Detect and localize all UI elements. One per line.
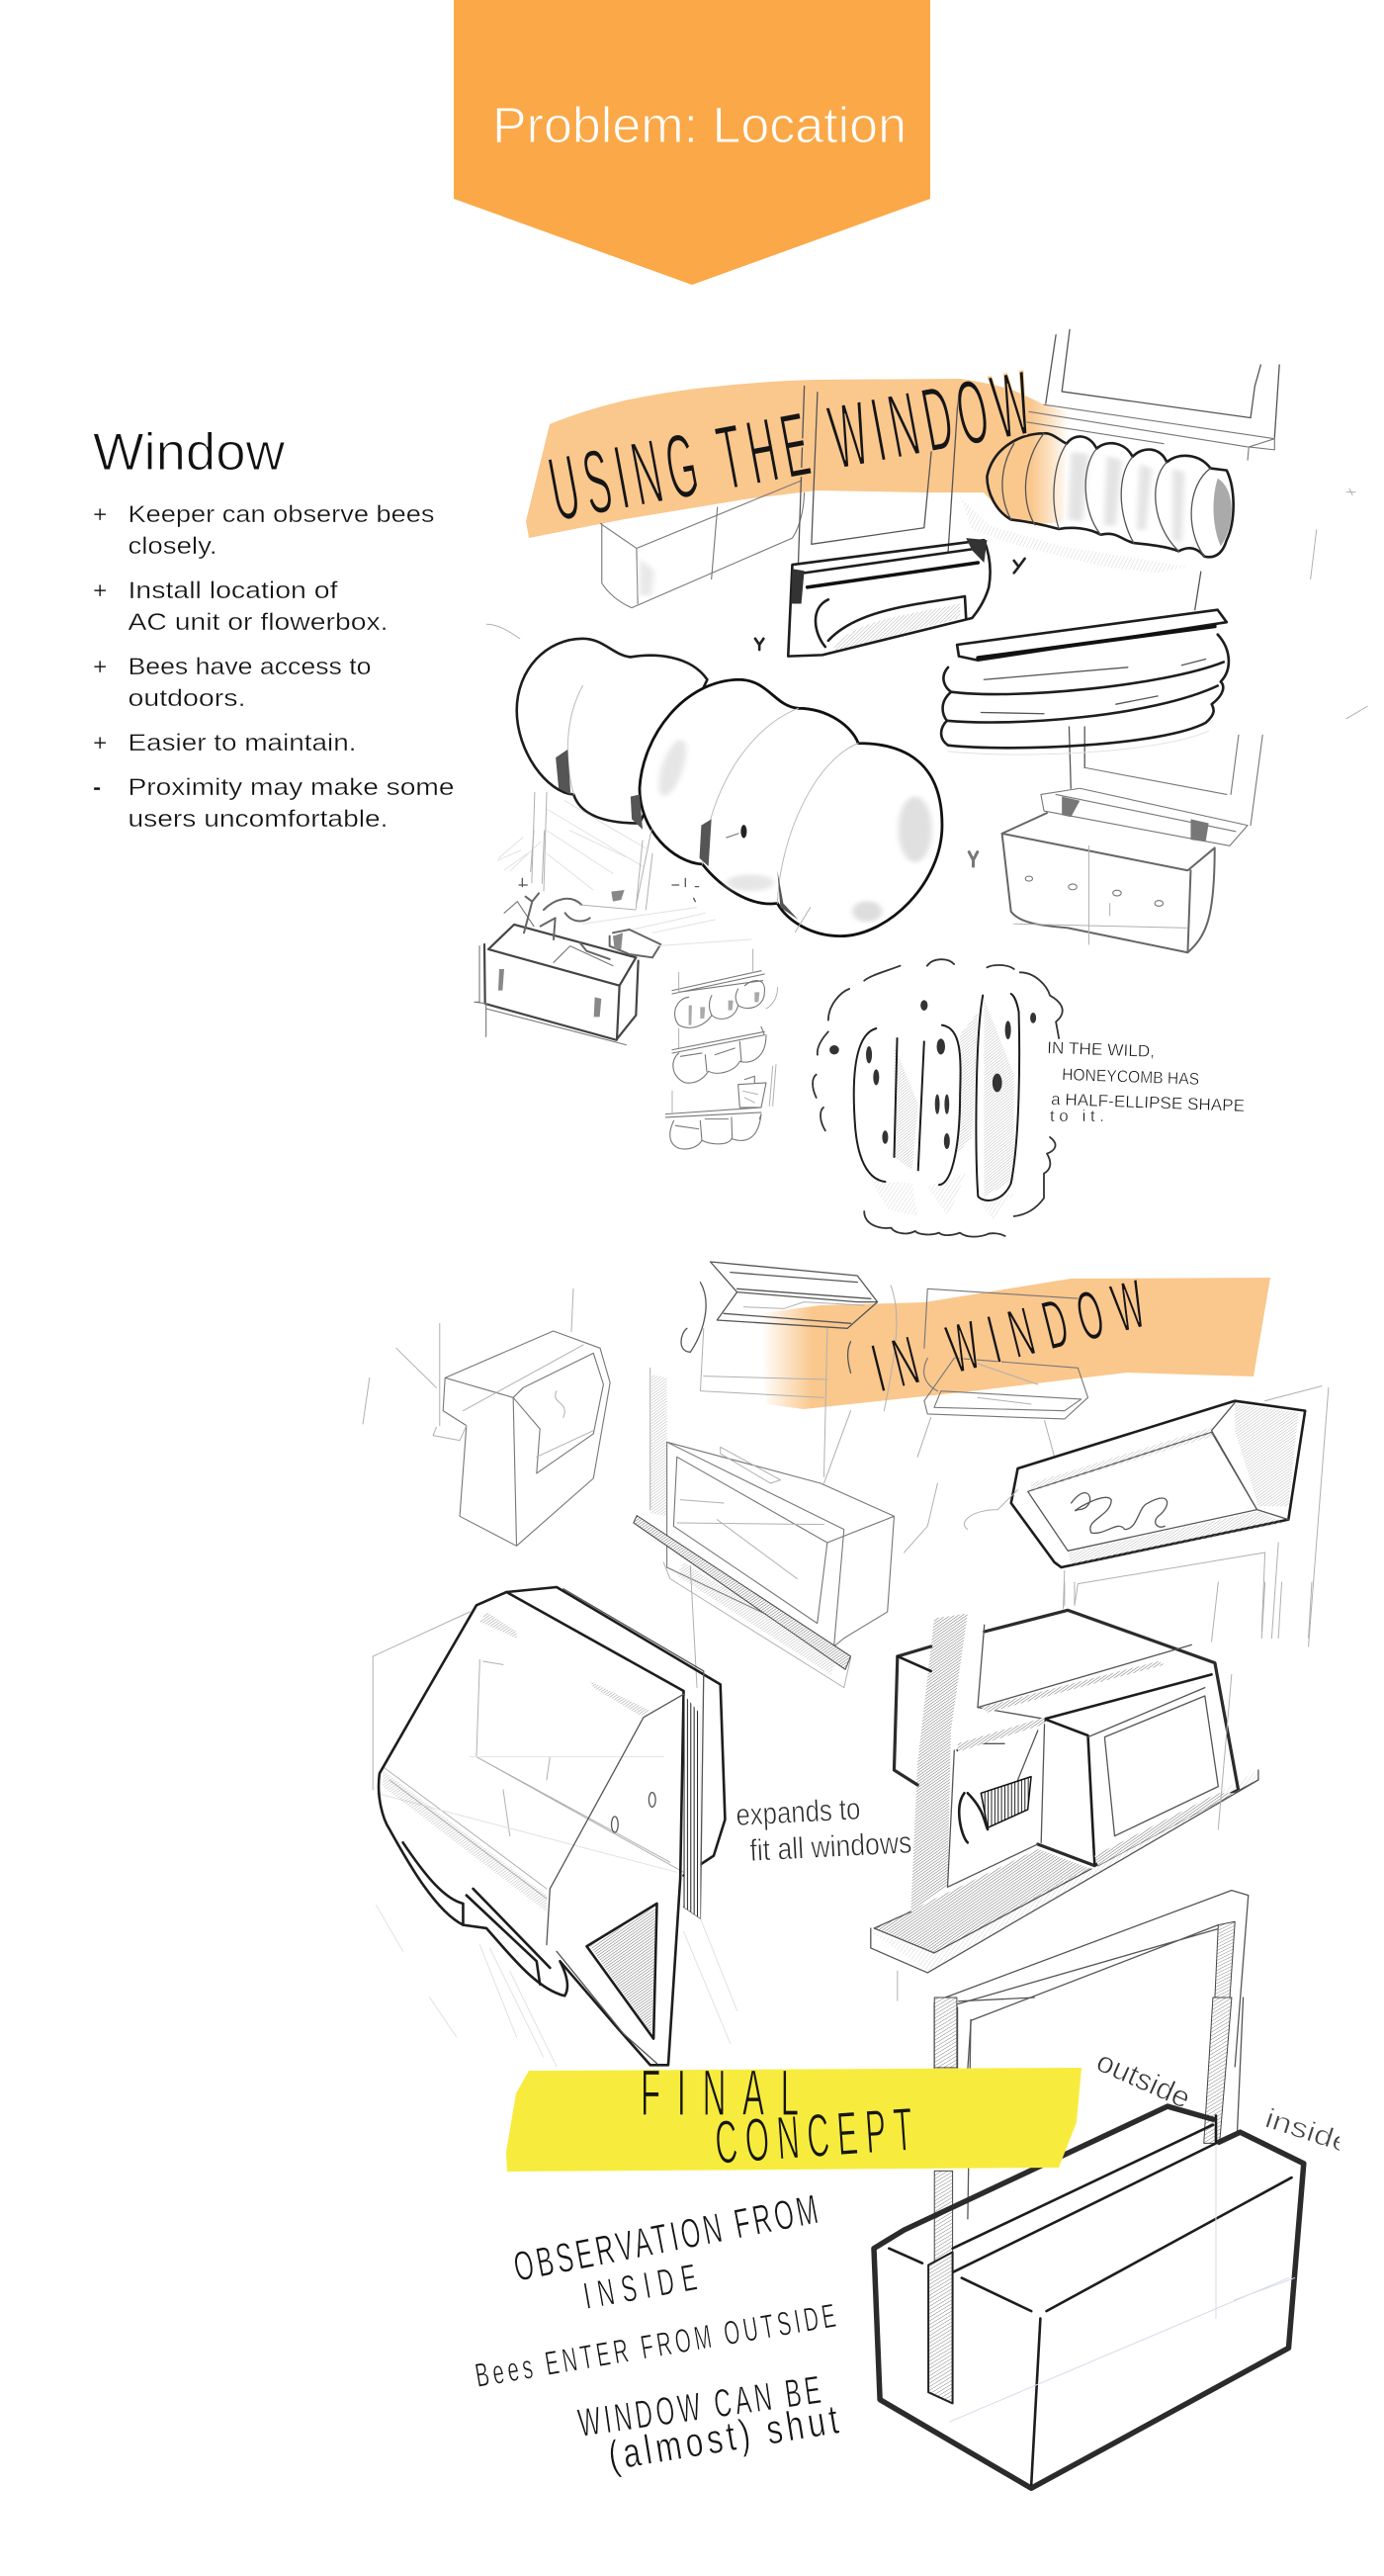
sketch: window frame strips <box>934 1998 1244 2264</box>
sketch: window frame above final concept <box>934 1891 1249 2070</box>
title banner: Problem: Location: Problem: Location <box>492 97 907 153</box>
sketch: box on window sill with vent <box>871 1582 1312 2000</box>
sketch: three stacked jar planters <box>665 949 778 1149</box>
sketch: flowerbox pocket with bar <box>755 387 1025 657</box>
icon: three half-ellipse honeycomb slabs <box>894 999 1014 1197</box>
list: pros and cons of window location: Bees have access to <box>129 654 372 680</box>
handwritten heading: FINAL CONCEPT <box>641 2058 914 2177</box>
sketch: central box on window sill <box>634 1375 894 1688</box>
sketches: window concepts, lower sheet bottom <box>373 1582 1312 2070</box>
list: pros and cons of window location: + <box>93 577 107 604</box>
annotation: final concept notes: INSIDE <box>580 2257 700 2317</box>
annotation: honeycomb note: IN THE WILD, <box>1047 1038 1155 1061</box>
list: pros and cons of window location: - <box>93 774 101 801</box>
annotation: final concept notes: OBSERVATION FROM <box>510 2187 822 2291</box>
annotation: inside label: inside <box>1261 2102 1355 2160</box>
highlight: orange brush behind IN WINDOW <box>761 1278 1270 1409</box>
title banner: Problem: Location <box>454 0 930 285</box>
list: pros and cons of window location: Keeper can observe bees <box>129 501 435 528</box>
sketch: final box outline <box>874 2106 1304 2488</box>
sketch: window frame with sill <box>1020 329 1279 460</box>
list: pros and cons of window location: + <box>93 654 107 680</box>
sketch: small planter with flowers, lower left <box>475 831 778 1149</box>
sketch: accordion flexible hive <box>941 572 1229 788</box>
sketch: angled window box, thick outline <box>905 1386 1329 1646</box>
sketch: T-shaped wall unit <box>363 1288 610 1546</box>
handwritten heading: FINAL CONCEPT: CONCEPT <box>713 2096 914 2177</box>
annotation: expands to fit all windows: expands to <box>735 1791 861 1832</box>
list: pros and cons of window location: users uncomfortable. <box>129 806 388 833</box>
sketch: rounded wall box <box>601 481 805 608</box>
list: pros and cons of window location: + <box>93 501 107 528</box>
annotation: honeycomb note: a HALF-ELLIPSE SHAPE <box>1051 1090 1245 1115</box>
sketch: second hook box inside the highlight <box>917 1288 1087 1457</box>
annotation: outside label: outside <box>1091 2045 1195 2115</box>
sketch: window-mounted planter box <box>969 735 1262 952</box>
annotation: honeycomb note: HONEYCOMB HAS <box>1062 1065 1199 1089</box>
highlight: IN WINDOW label: IN WINDOW <box>865 1265 1153 1407</box>
highlight: orange brush behind USING THE WINDOW <box>526 379 1070 538</box>
list: pros and cons of window location <box>93 501 455 833</box>
annotation: expands to fit all windows <box>735 1791 912 1868</box>
sketch: wild honeycomb in a cloud of bees <box>813 959 1063 1237</box>
list: pros and cons of window location: closely. <box>129 533 217 560</box>
annotation: final concept notes <box>473 2187 842 2479</box>
sketch: final concept hive box through window <box>874 1998 1304 2488</box>
list: pros and cons of window location: Proximity may make some <box>129 774 455 801</box>
sketch: top-mounted hook box <box>650 1262 897 1510</box>
annotation: final concept notes: (almost) shut <box>605 2395 842 2479</box>
list: pros and cons of window location: outdoors. <box>129 685 245 712</box>
annotation: honeycomb note: to it. <box>1050 1107 1104 1125</box>
list: pros and cons of window location: + <box>93 730 107 756</box>
handwritten heading: USING THE WINDOW: USING THE WINDOW <box>542 351 1038 540</box>
icon: bees on the comb <box>829 1000 1036 1149</box>
sketch: ribbed coil hive <box>960 433 1234 573</box>
sketches: window concepts, upper sheet <box>486 329 1367 952</box>
sketch: large inflated bubble hive <box>486 624 942 936</box>
icon: scalloped cloud outline <box>813 959 1063 1237</box>
list: pros and cons of window location: AC unit or flowerbox. <box>129 609 388 636</box>
heading: Window: Window <box>93 423 286 482</box>
annotation: honeycomb note <box>1047 1038 1245 1125</box>
sketches: window concepts, lower sheet top <box>363 1262 1329 1688</box>
annotation: final concept notes: Bees ENTER FROM OUTSIDE <box>473 2297 838 2394</box>
list: pros and cons of window location: Install location of <box>129 577 338 604</box>
handwritten heading: FINAL CONCEPT: FINAL <box>641 2058 799 2130</box>
list: pros and cons of window location: Easier to maintain. <box>129 730 356 756</box>
annotation: final concept notes: WINDOW CAN BE <box>575 2367 823 2444</box>
annotation: expands to fit all windows: fit all windows <box>749 1824 912 1868</box>
highlight: yellow FINAL CONCEPT band <box>506 2068 1081 2172</box>
sketch: large wedge-shaped hive <box>373 1587 737 2067</box>
